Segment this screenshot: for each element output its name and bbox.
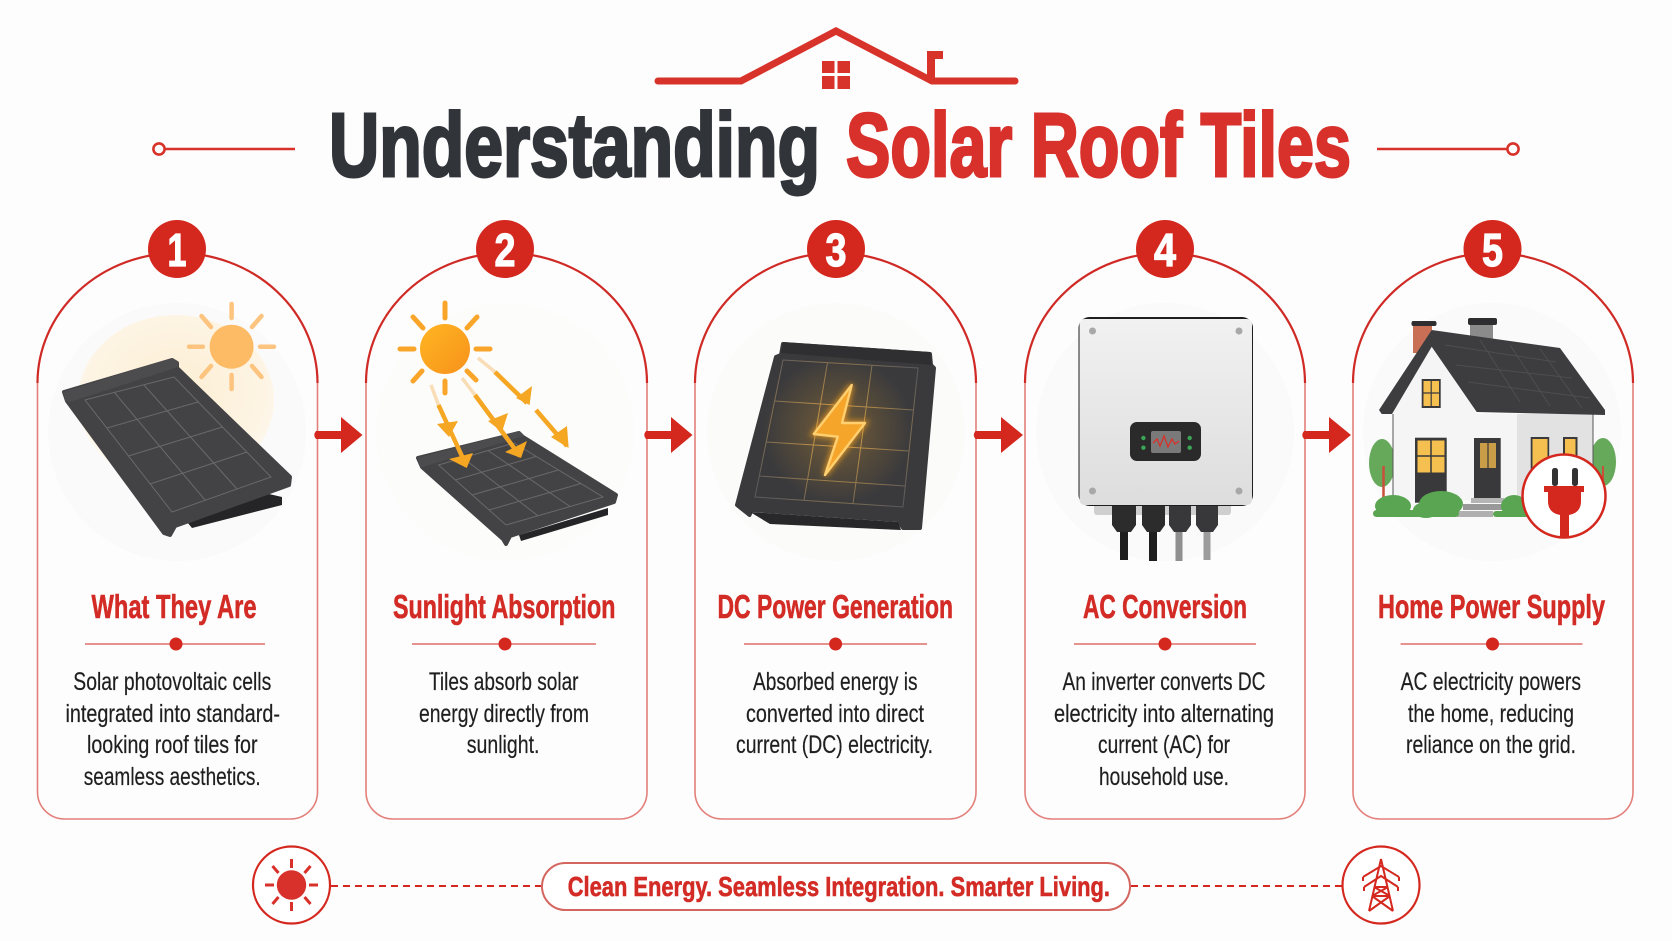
dashed connector right — [1131, 885, 1342, 887]
title rail right — [1377, 143, 1519, 155]
arrow 3 to 4 — [974, 417, 1023, 453]
body 1: seamless aesthetics. — [84, 763, 261, 791]
heading 2: Sunlight Absorption — [393, 588, 615, 625]
header roof icon — [658, 31, 1015, 89]
body 2 — [419, 668, 589, 759]
panel 3: DC Power Generation — [695, 220, 976, 819]
body 2: energy directly from — [419, 700, 589, 728]
title rail left — [153, 143, 295, 155]
arrow 2 to 3 — [644, 417, 692, 453]
footer tagline pill — [542, 863, 1130, 910]
footer sun icon — [253, 846, 330, 924]
body 4: electricity into alternating — [1054, 700, 1274, 728]
body 3 — [736, 668, 933, 759]
heading 1: What They Are — [92, 588, 256, 625]
badge 1: 1 — [168, 224, 186, 276]
body 1: integrated into standard- — [66, 700, 280, 728]
body 3: converted into direct — [746, 700, 924, 728]
arrow 4 to 5 — [1302, 417, 1351, 453]
body 5: the home, reducing — [1408, 700, 1574, 728]
illustration: glowing tile with lightning bolt — [737, 342, 934, 530]
body 4: An inverter converts DC — [1062, 668, 1266, 696]
body 5: reliance on the grid. — [1406, 731, 1576, 759]
badge 5: 5 — [1482, 224, 1503, 276]
body 3: Absorbed energy is — [753, 668, 918, 696]
illustration: tile with sun — [63, 304, 290, 535]
body 1: looking roof tiles for — [87, 731, 258, 759]
badge 5 — [1464, 220, 1522, 278]
heading 4: AC Conversion — [1083, 588, 1247, 625]
badge 2 — [476, 220, 534, 278]
panel 2: Sunlight Absorption — [366, 220, 647, 819]
body 4: household use. — [1099, 763, 1229, 791]
arrow 1 to 2 — [314, 417, 362, 453]
title — [329, 96, 1351, 196]
divider 1 — [85, 638, 265, 650]
title: Solar Roof Tiles — [846, 96, 1351, 196]
body 4: current (AC) for — [1098, 731, 1230, 759]
body 1: Solar photovoltaic cells — [73, 668, 271, 696]
illustration: house with plug — [1369, 318, 1616, 538]
body 5 — [1401, 668, 1581, 759]
body 3: current (DC) electricity. — [736, 731, 933, 759]
illustration: inverter box — [1078, 317, 1253, 561]
body 5: AC electricity powers — [1401, 668, 1581, 696]
divider 4 — [1074, 638, 1256, 650]
panel 4: AC Conversion — [1025, 220, 1305, 819]
badge 1 — [148, 220, 206, 278]
body 4 — [1054, 668, 1274, 791]
badge 4 — [1136, 220, 1194, 278]
heading 3: DC Power Generation — [718, 588, 953, 625]
dashed connector left — [331, 885, 541, 887]
badge 3: 3 — [826, 224, 846, 276]
panel 5: Home Power Supply — [1353, 220, 1633, 819]
body 2: sunlight. — [467, 731, 540, 759]
body 1 — [66, 668, 280, 791]
divider 3 — [744, 638, 927, 650]
footer power tower icon — [1342, 846, 1420, 924]
panel 1: What They Are — [38, 220, 318, 819]
badge 3 — [807, 220, 865, 278]
illustration: sun rays onto tile — [400, 303, 616, 544]
badge 2: 2 — [494, 224, 516, 276]
divider 5 — [1401, 638, 1582, 650]
badge 4: 4 — [1154, 224, 1176, 276]
title: Understanding — [329, 96, 820, 196]
footer tagline pill: Clean Energy. Seamless Integration. Smarter Living. — [568, 871, 1110, 902]
divider 2 — [412, 638, 596, 650]
body 2: Tiles absorb solar — [429, 668, 578, 696]
